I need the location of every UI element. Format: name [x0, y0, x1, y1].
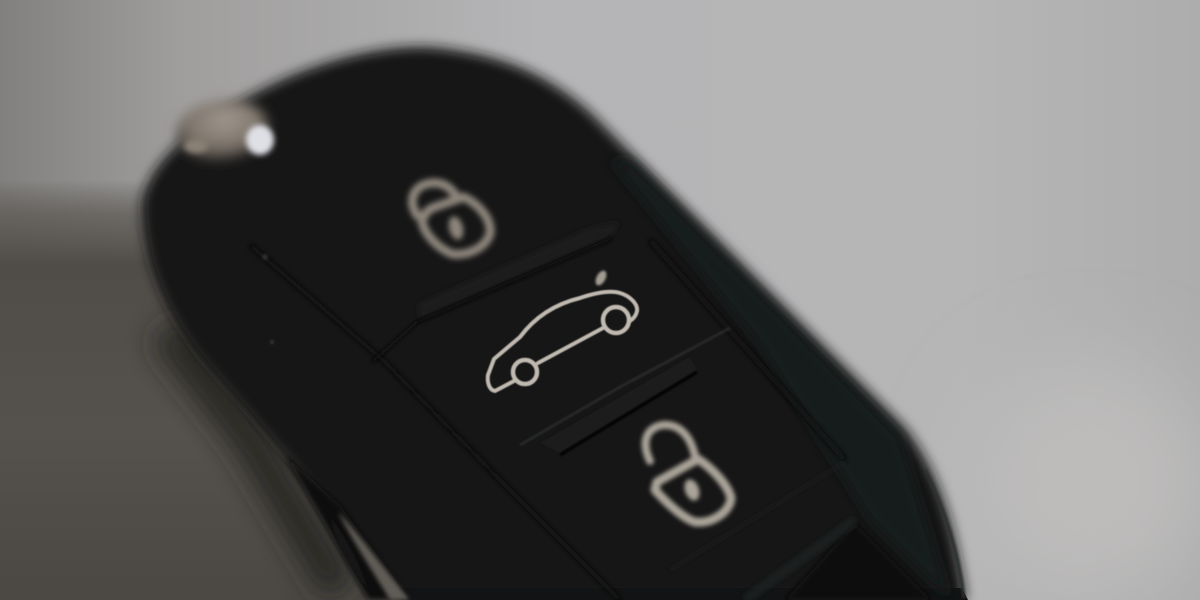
ridge: between middle and lower buttons [540, 357, 697, 453]
end recess ridge [745, 520, 855, 600]
lighter lower right surface [970, 360, 1200, 600]
right edge highlight [925, 470, 964, 598]
seam below ridge [560, 372, 697, 455]
side dark slot [330, 517, 368, 590]
highlight line above lower button [520, 328, 730, 445]
contact shadow along the fob [165, 330, 340, 590]
lower end seam [670, 462, 845, 570]
fob bottom edge fill [392, 588, 968, 600]
key fob body [142, 47, 968, 600]
side silver trim [338, 512, 410, 600]
fob outline [142, 47, 966, 600]
ridge: between upper and middle buttons [418, 222, 620, 320]
small dots on the body [262, 254, 268, 260]
end recess [785, 523, 932, 600]
icon: open boot lid [593, 269, 609, 287]
metal release button [172, 94, 274, 166]
icon: car with open boot [488, 269, 637, 391]
side dark band [285, 455, 410, 600]
right side seam [650, 240, 845, 460]
shadow: lower left [0, 180, 420, 600]
right side bevel band [610, 160, 950, 600]
icon: closed padlock [412, 183, 490, 254]
icon: open padlock [646, 425, 731, 522]
button panel seam [250, 245, 620, 600]
seam: upper and middle buttons [372, 238, 612, 362]
